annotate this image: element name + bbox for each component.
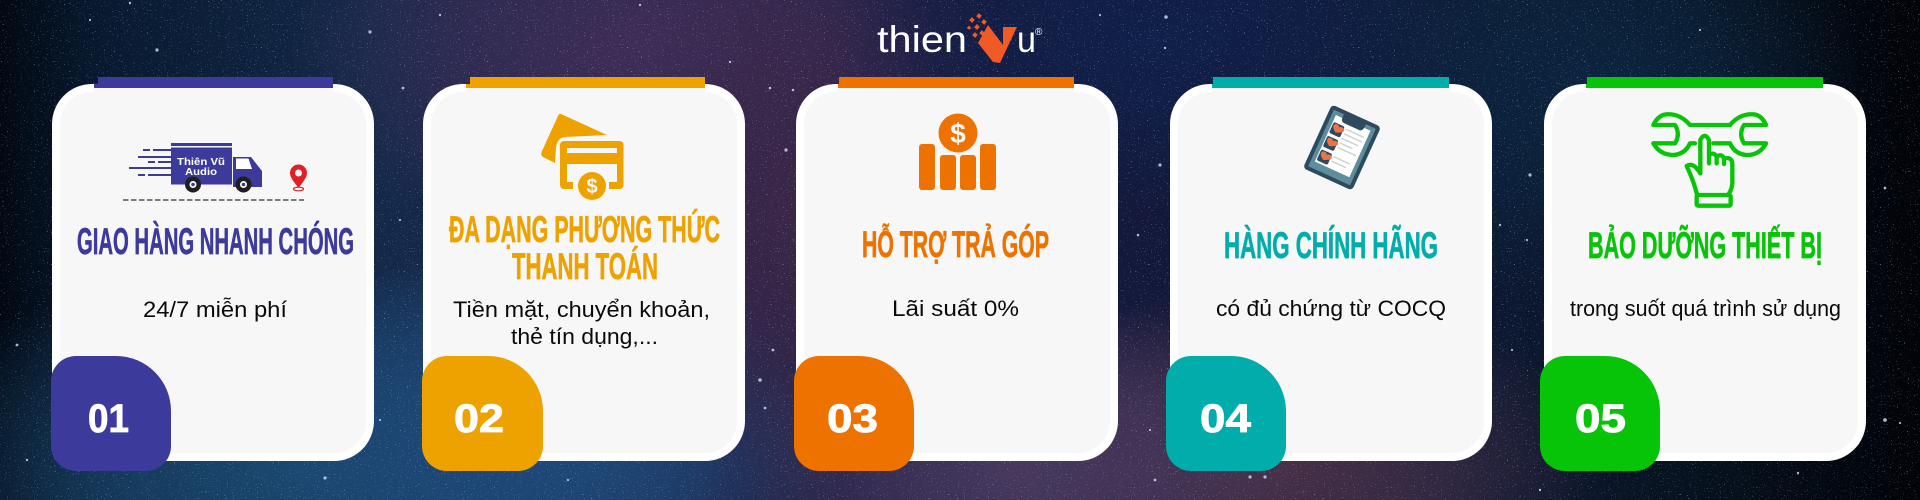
heading: ĐA DẠNG PHƯƠNG THỨC bbox=[449, 208, 720, 250]
icon: coin over bars: $ bbox=[950, 118, 966, 149]
number badge 04: 04 bbox=[1200, 397, 1252, 441]
panel: card 05 bảo dưỡng bbox=[1540, 77, 1866, 471]
panel: card 04 hàng chính hãng bbox=[1166, 77, 1492, 471]
heading: THANH TOÁN bbox=[512, 246, 658, 287]
number badge 02 bbox=[422, 356, 543, 471]
heading: HỖ TRỢ TRẢ GÓP bbox=[862, 223, 1049, 265]
logo: thienVu: u bbox=[1017, 19, 1036, 60]
text: description: Tiền mặt, chuyển khoản, bbox=[453, 297, 710, 322]
icon: delivery truck: Audio bbox=[185, 167, 217, 178]
icon: delivery truck bbox=[129, 143, 262, 192]
number badge 05 bbox=[1540, 356, 1660, 471]
number badge 02: 02 bbox=[454, 397, 504, 441]
heading bbox=[449, 208, 720, 287]
heading: GIAO HÀNG NHANH CHÓNG bbox=[77, 220, 354, 262]
text: description: Lãi suất 0% bbox=[892, 296, 1019, 321]
icon: wrench and hand bbox=[1653, 114, 1766, 206]
logo: thienVu: thien bbox=[877, 19, 967, 60]
logo: thienVu bbox=[877, 13, 1043, 63]
text: description: 24/7 miễn phí bbox=[143, 297, 287, 322]
icon: coin over bars bbox=[919, 112, 996, 190]
icon: location pin bbox=[290, 164, 307, 191]
panel: card 02 thanh toán bbox=[422, 77, 745, 471]
text: description: trong suốt quá trình sử dụng bbox=[1570, 296, 1841, 321]
number badge 03 bbox=[794, 356, 914, 471]
text: description: thẻ tín dụng,... bbox=[511, 324, 658, 349]
number badge 03: 03 bbox=[827, 397, 878, 441]
number badge 05: 05 bbox=[1575, 397, 1626, 441]
icon: clipboard checklist bbox=[1303, 104, 1381, 191]
icon: credit cards and coin bbox=[541, 114, 624, 201]
icon: credit cards and coin: $ bbox=[586, 176, 598, 198]
heading: HÀNG CHÍNH HÃNG bbox=[1224, 224, 1438, 266]
logo: thienVu: ® bbox=[1035, 27, 1043, 38]
icon: delivery truck: Thiên Vũ bbox=[177, 157, 225, 168]
number badge 01: 01 bbox=[88, 397, 129, 441]
number badge 04 bbox=[1166, 356, 1286, 471]
number badge 01 bbox=[51, 356, 171, 471]
text: description: có đủ chứng từ COCQ bbox=[1216, 296, 1446, 321]
panel: card 03 trả góp bbox=[794, 77, 1118, 471]
text: description bbox=[453, 297, 710, 349]
panel: card 01 giao hàng bbox=[51, 77, 374, 471]
